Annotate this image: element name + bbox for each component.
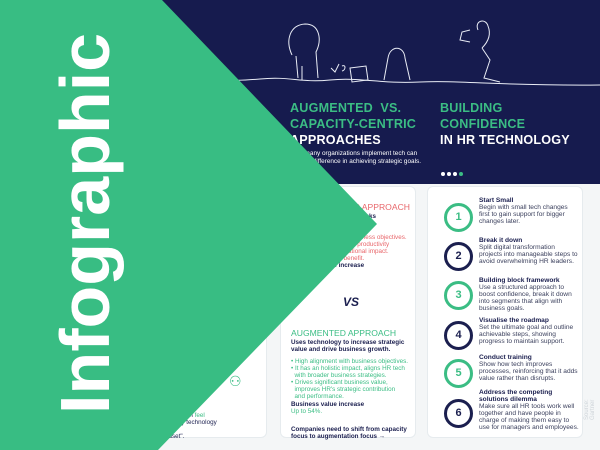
panel: middle comparison card: improves HR's strategic contribution (294, 386, 395, 393)
panel: middle comparison card: with limited organizational impact. (294, 248, 389, 255)
step 2 (444, 242, 473, 271)
VS icon: VS (343, 295, 359, 309)
step 6 (444, 399, 473, 428)
panel: middle comparison card: • High alignment with business objectives. (291, 358, 408, 365)
panel: steps card: Set the ultimate goal and outline achievable steps, showing progress to maintain support. (479, 324, 573, 345)
text: mindset: Employees often feel (146, 412, 205, 419)
panel: steps card: Visualise the roadmap (479, 317, 549, 324)
title: building confidence: IN HR TECHNOLOGY (440, 133, 570, 147)
panel: middle comparison card: and performance. (294, 393, 344, 400)
panel: steps card: Address the competing solutions dilemma (479, 389, 552, 403)
panel: steps card: Break it down (479, 237, 522, 244)
navy header band (0, 0, 600, 184)
subtitle: How many organizations implement tech can (290, 150, 417, 157)
panel: middle comparison card: • Drives significant business value, (291, 379, 388, 386)
step 4 (444, 321, 473, 350)
panel: steps card (427, 186, 583, 438)
title: building confidence: BUILDING (440, 101, 502, 115)
augmented heading: AUGMENTED APPROACH (291, 328, 396, 338)
capacity heading: CAPACITY-CENTRIC APPROACH (277, 202, 410, 212)
subtitle (290, 150, 421, 165)
text: mindset: "old mindset". (146, 433, 184, 440)
panel: steps card: Start Small (479, 197, 513, 204)
panel: middle comparison card: • Focuses on individual productivity (291, 241, 389, 248)
panel: steps card: Conduct training (479, 354, 532, 361)
subtitle: make a difference in achieving strategic goals. (290, 158, 421, 165)
text: mindset: threatened by technology (146, 419, 217, 426)
panel: middle comparison card: • Limited business benefit. (291, 255, 364, 262)
step 2: 2 (455, 250, 462, 262)
step 6: 6 (455, 407, 462, 419)
panel: middle comparison card: Uses technology to increase strategic (291, 339, 404, 346)
panel: middle comparison card: Up to 54%. (291, 408, 322, 415)
panel: steps card: Building block framework (479, 277, 560, 284)
title: building confidence (440, 101, 570, 147)
title: augmented vs capacity-centric: APPROACHES (290, 133, 381, 147)
panel: steps card: Begin with small tech changes first to gain support for bigger changes later. (479, 204, 568, 225)
source note: Source: Gartner (584, 399, 596, 420)
step 3: 3 (455, 289, 462, 301)
panel: middle comparison card: with broader business strategies. (294, 372, 387, 379)
title: augmented vs capacity-centric: CAPACITY-CENTRIC (290, 117, 416, 131)
title: augmented vs capacity-centric: AUGMENTED VS. (290, 101, 401, 115)
panel: middle comparison card: • It has an holistic impact, aligns HR tech (291, 365, 405, 372)
title: augmented vs capacity-centric (290, 101, 416, 147)
panel: middle comparison card: Business value increase (291, 262, 364, 269)
panel: middle comparison card: • Low alignment with business objectives. (291, 234, 407, 241)
text: mindset (146, 412, 217, 440)
pagination dots (441, 172, 463, 176)
panel: middle comparison card: value and drive business growth. (291, 346, 390, 353)
step 1: 1 (455, 211, 462, 223)
panel: steps card: Make sure all HR tools work well together and have people in charge of making them easy to use for managers and employees. (479, 403, 579, 431)
step 1 (444, 203, 473, 232)
panel: middle comparison card: Uses tech to automate tasks (291, 213, 376, 220)
step 3 (444, 281, 473, 310)
step 4: 4 (455, 329, 462, 341)
panel: steps card: Show how tech improves processes, reinforcing that it adds value rather than disrupts. (479, 361, 578, 382)
title: Infographic vertical: Infographic (46, 33, 124, 414)
step 5: 5 (455, 367, 462, 379)
icon: people: ⚇ (229, 373, 242, 389)
panel: middle comparison card: focus to augmentation focus → (291, 433, 385, 440)
panel: steps card: Split digital transformation projects into manageable steps to avoid overwhelming HR leaders. (479, 244, 578, 265)
panel: steps card: Use a structured approach to boost confidence, break it down into segments that align with business goals. (479, 284, 572, 312)
panel: left card (140, 186, 267, 438)
step 5 (444, 359, 473, 388)
panel: middle comparison card (280, 186, 416, 438)
line illustration (238, 20, 600, 86)
panel: middle comparison card: Companies need to shift from capacity (291, 426, 407, 433)
title: building confidence: CONFIDENCE (440, 117, 525, 131)
panel: middle comparison card: Business value increase (291, 401, 364, 408)
